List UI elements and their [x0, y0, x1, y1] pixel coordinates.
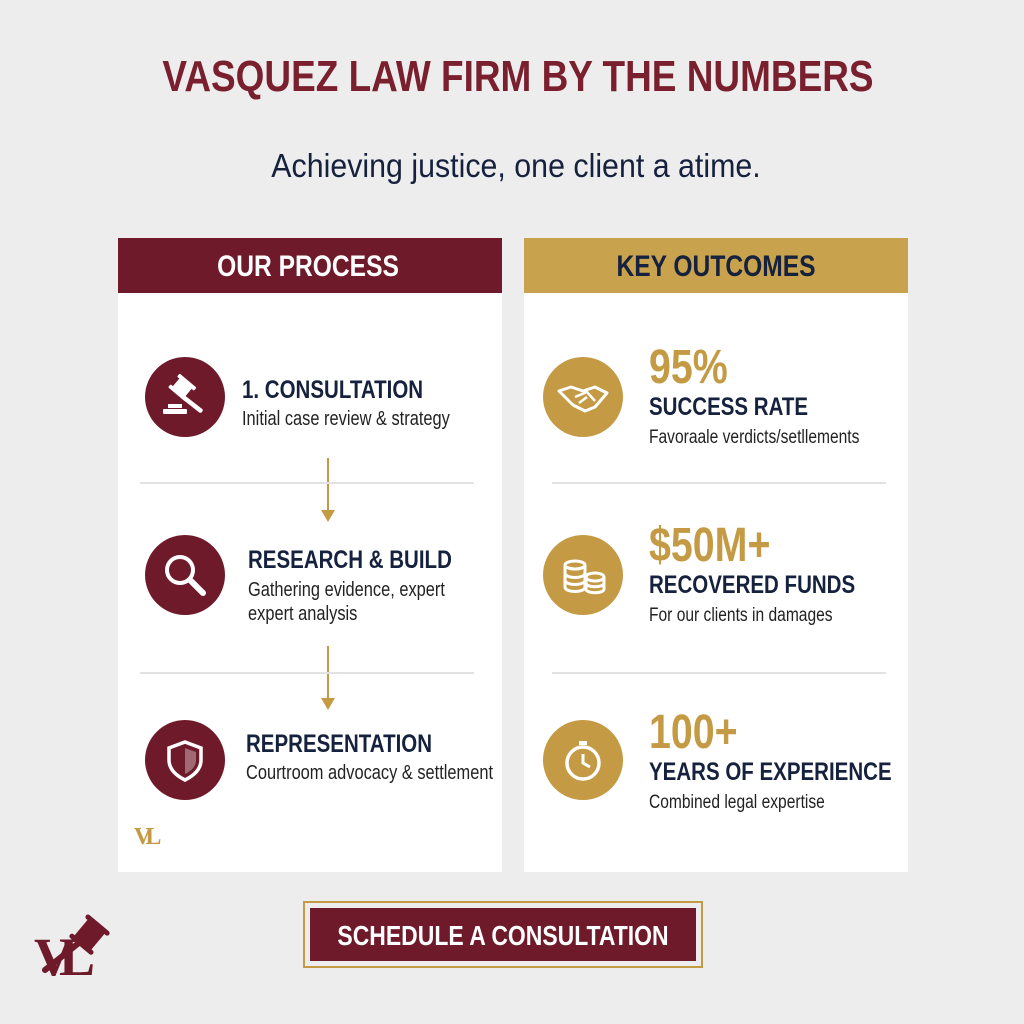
subtitle: Achieving justice, one client a atime. [271, 147, 761, 184]
icon: magnifier [145, 535, 225, 615]
step 2 text: expert analysis [248, 603, 357, 625]
heading: key outcomes: KEY OUTCOMES [616, 250, 816, 283]
panel: key outcomes [524, 238, 908, 872]
stat 2 [649, 519, 855, 626]
icon: handshake [543, 357, 623, 437]
stat 1: Favoraale verdicts/setllements [649, 427, 859, 448]
stat 3: YEARS OF EXPERIENCE [649, 758, 892, 786]
heading: our process [118, 238, 502, 293]
stat 3: Combined legal expertise [649, 792, 825, 813]
stat 1: SUCCESS RATE [649, 393, 808, 421]
title: VASQUEZ LAW FIRM BY THE NUMBERS [162, 52, 874, 101]
arrow 1 [321, 458, 335, 522]
stat 1 [649, 341, 859, 448]
small logo: VL [134, 824, 155, 850]
button: schedule a consultation: SCHEDULE A CONSULTATION [337, 920, 669, 951]
stat 2: For our clients in damages [649, 605, 833, 626]
logo: VL gavel: VL [34, 927, 81, 987]
step 3 text: Courtroom advocacy & settlement [246, 762, 493, 784]
step 1 text: Initial case review & strategy [242, 408, 450, 430]
stat 2: $50M+ [649, 519, 770, 572]
panel: our process [118, 238, 502, 872]
step 1 text [242, 376, 450, 430]
logo: VL gavel [34, 914, 110, 987]
heading: key outcomes [524, 238, 908, 293]
icon: stopwatch [543, 720, 623, 800]
icon: coins [543, 535, 623, 615]
step 2 text: Gathering evidence, expert [248, 579, 445, 601]
stat 2: RECOVERED FUNDS [649, 571, 855, 599]
icon: gavel [145, 357, 225, 437]
step 3 text [246, 730, 493, 784]
step 2 text: RESEARCH & BUILD [248, 546, 452, 574]
step 1 text: 1. CONSULTATION [242, 376, 423, 404]
arrow 2 [321, 646, 335, 710]
stat 3: 100+ [649, 706, 738, 759]
stat 3 [649, 706, 892, 813]
heading: our process: OUR PROCESS [217, 250, 399, 283]
step 2 text [248, 546, 452, 625]
step 3 text: REPRESENTATION [246, 730, 432, 758]
icon: shield [145, 720, 225, 800]
button: schedule a consultation [303, 901, 703, 968]
stat 1: 95% [649, 341, 728, 394]
